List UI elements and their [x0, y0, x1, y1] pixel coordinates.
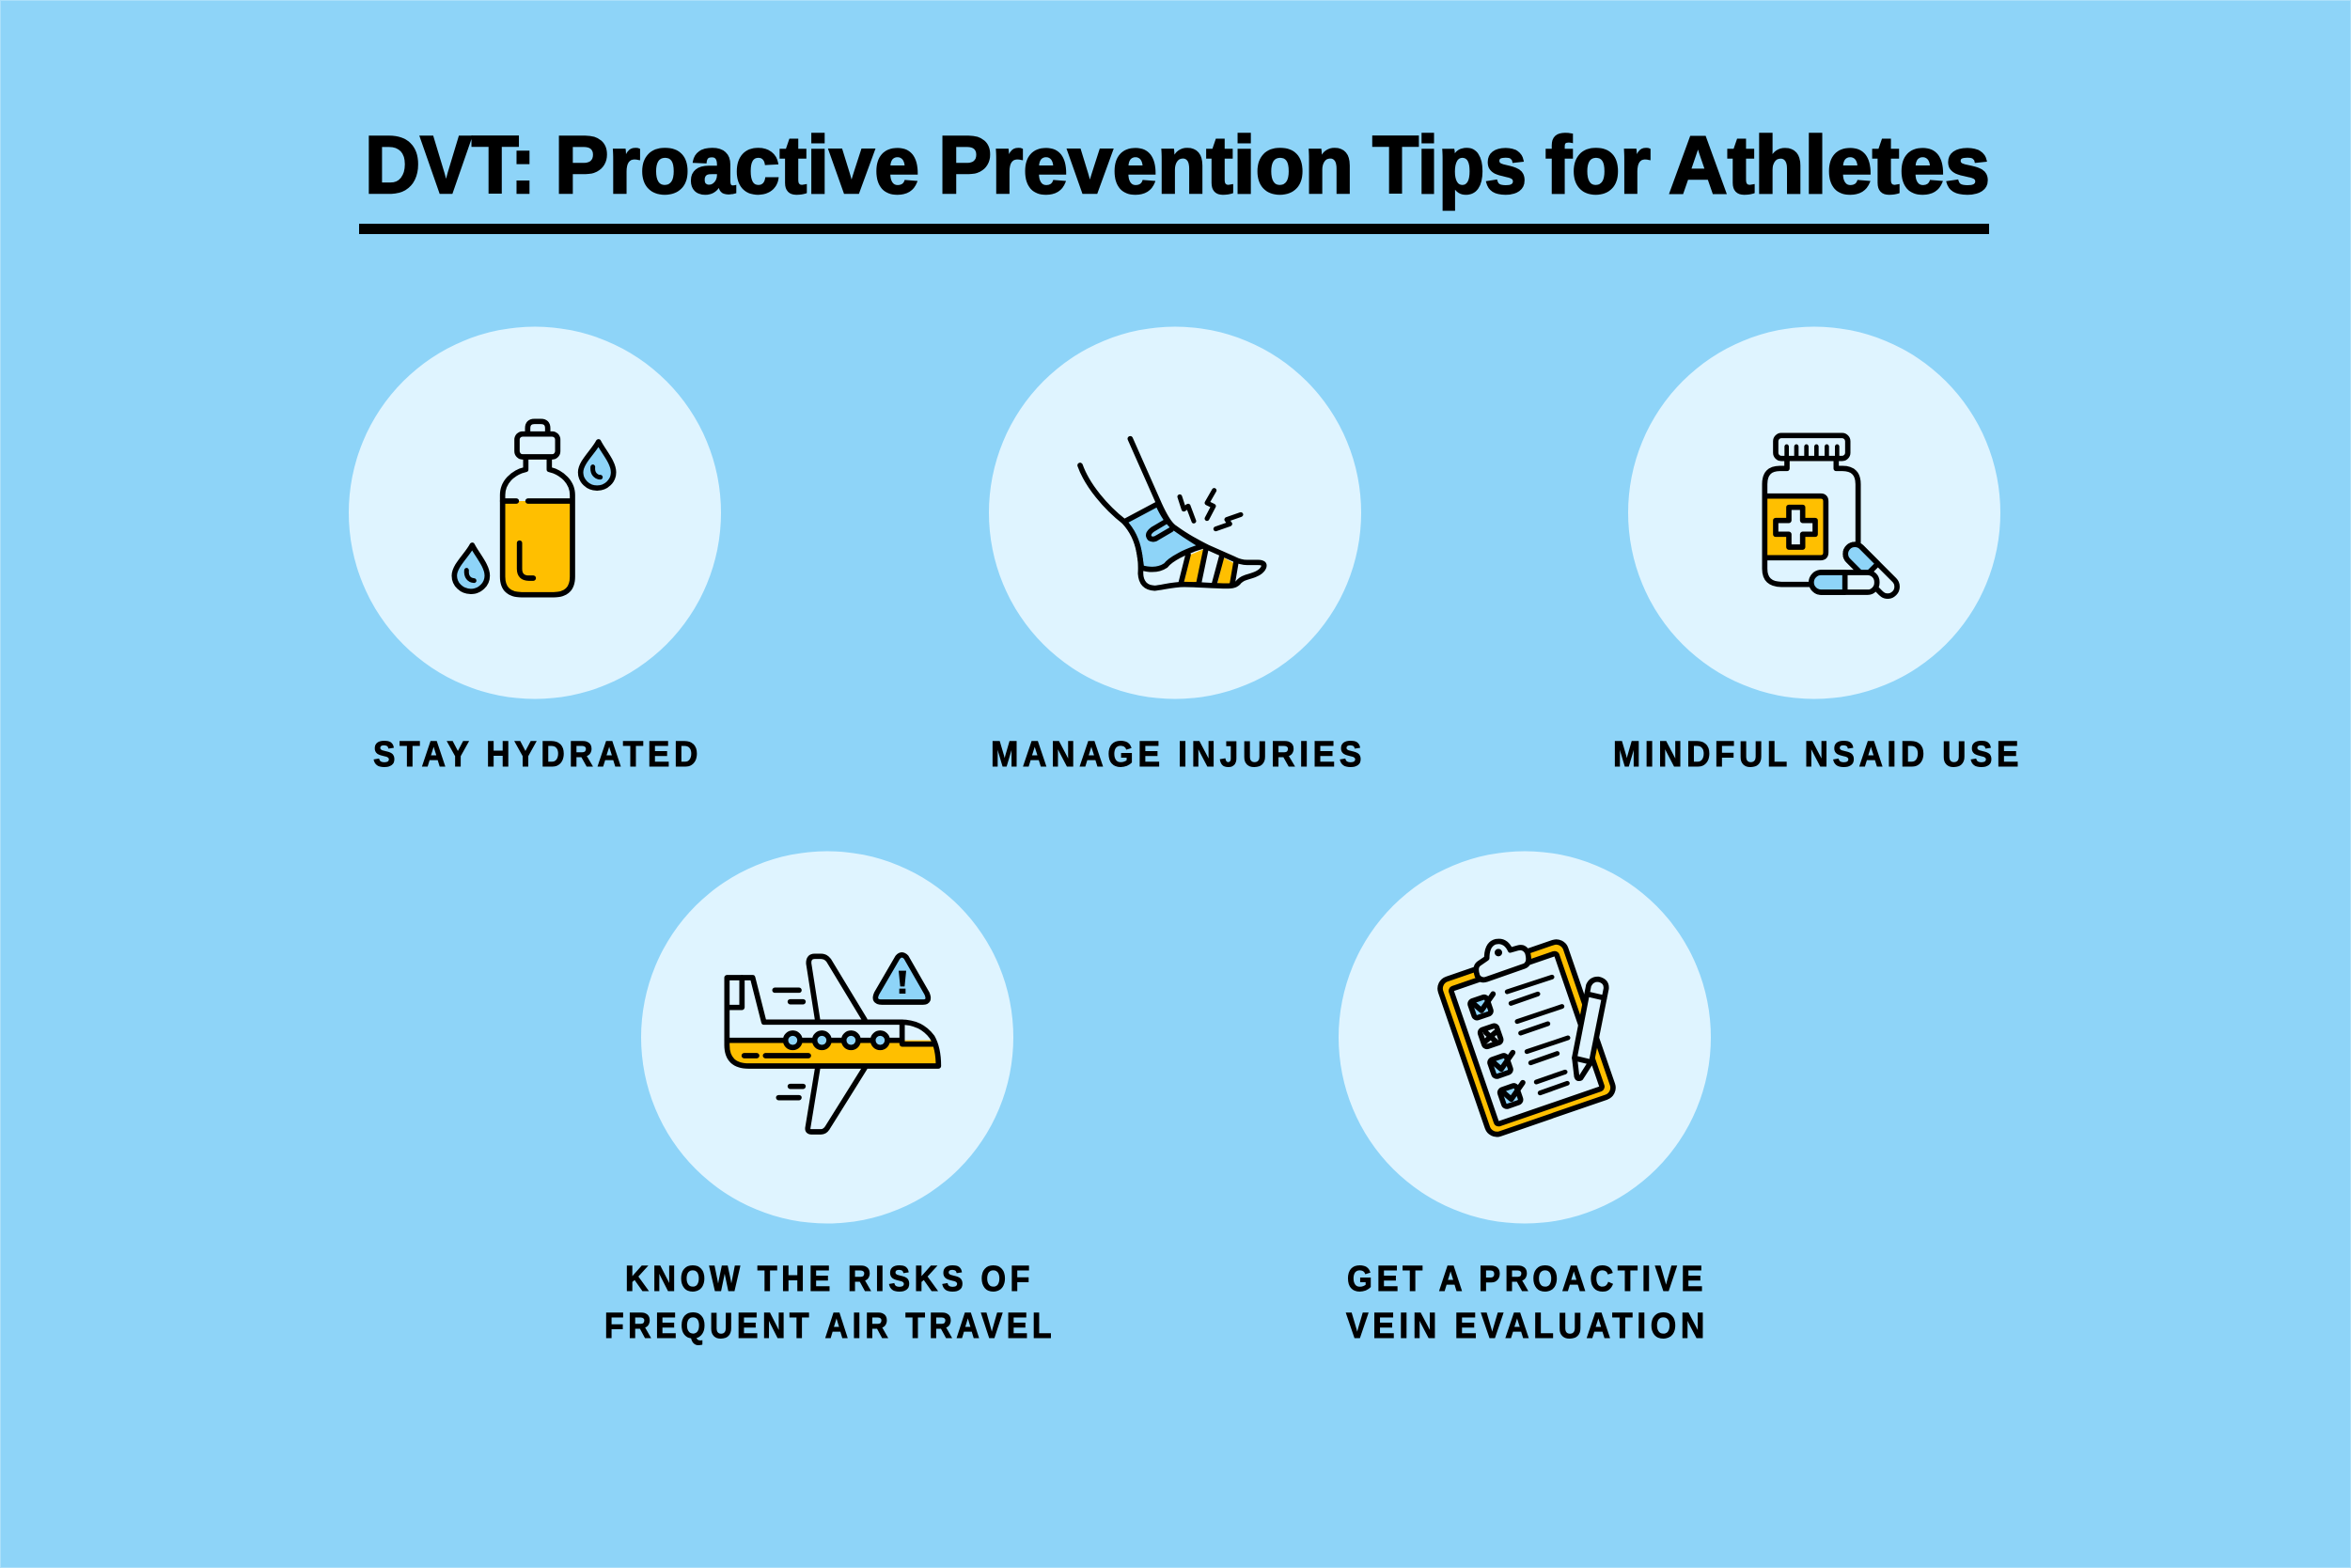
panel: frequent air travel — [604, 852, 1056, 1346]
title: Proactive — [555, 120, 919, 211]
icon: water bottle with drops — [454, 421, 614, 595]
label: manage injuries: MANAGE INJURIES — [991, 735, 1366, 775]
label: mindful nsaid use: MINDFUL NSAID USE — [1613, 735, 2023, 775]
title: for — [1545, 120, 1651, 211]
label: get a proactive vein evaluation: GET A PROACTIVE — [1347, 1260, 1707, 1299]
title: Prevention — [938, 120, 1354, 211]
title underline — [359, 224, 1989, 234]
label: know the risks of frequent air travel: FREQUENT AIR TRAVEL — [604, 1307, 1056, 1346]
panel: manage injuries — [989, 327, 1366, 775]
icon: clipboard checklist and pencil — [1437, 939, 1616, 1137]
label: get a proactive vein evaluation — [1346, 1260, 1709, 1346]
label: know the risks of frequent air travel: KNOW THE RISKS OF — [625, 1260, 1034, 1299]
title: Tips — [1372, 120, 1527, 211]
title: Athletes — [1669, 120, 1990, 211]
circle: vein evaluation — [1339, 852, 1711, 1224]
panel: proactive vein evaluation — [1339, 852, 1711, 1346]
icon: pill bottle and capsules — [1764, 435, 1901, 600]
icon: airplane with warning — [727, 955, 938, 1132]
panel: mindful nsaid use — [1613, 327, 2023, 775]
label: stay hydrated: STAY HYDRATED — [373, 735, 702, 775]
circle: stay hydrated — [349, 327, 721, 699]
icon: bandaged ankle — [1080, 439, 1264, 588]
label: know the risks of frequent air travel — [604, 1260, 1056, 1346]
circle: air travel — [641, 852, 1013, 1224]
panel: stay hydrated — [349, 327, 721, 775]
circle: mindful nsaid use — [1628, 327, 2000, 699]
title: DVT: — [365, 120, 536, 211]
label: get a proactive vein evaluation: VEIN EVALUATION — [1346, 1307, 1709, 1346]
circle: manage injuries — [989, 327, 1361, 699]
